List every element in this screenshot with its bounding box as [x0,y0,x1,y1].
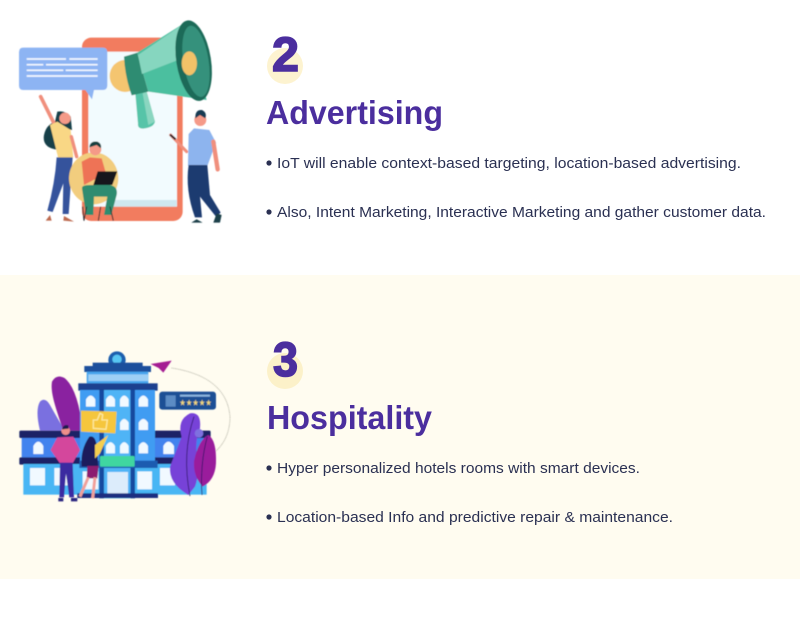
hotel wings [19,431,211,495]
panel: hospitality background [0,275,800,579]
plants right [170,413,216,496]
speech bubble [19,48,107,99]
hotel tower [77,351,158,498]
plants left [37,376,83,431]
bullet: smart rooms: Hyper personalized hotels rooms with smart devices. [277,460,640,477]
megaphone [110,18,217,129]
thumbs up sign [81,411,117,433]
heading: Hospitality: Hospitality [267,399,433,436]
bullet: context targeting: IoT will enable context-based targeting, location-based advertising. [277,155,741,172]
rating badge [159,392,216,410]
heading: Advertising: Advertising [266,94,443,131]
paper plane [151,361,172,373]
rating badge: ★★★★★ [179,397,212,407]
number 3 with circle: 3 [273,334,298,387]
man [51,425,80,501]
illustration: hotel [19,351,230,501]
seated man with laptop [69,142,118,221]
number 2 with circle: 2 [272,29,299,82]
bullet: predictive repair: Location-based Info and predictive repair & maintenance. [277,509,673,526]
phone [82,38,183,221]
woman [41,97,77,222]
illustration: advertising megaphone and phone [19,18,222,223]
bullet: intent marketing: Also, Intent Marketing, Interactive Marketing and gather customer data. [277,204,766,221]
dotted flight path [172,368,230,453]
woman holding sign [80,435,108,498]
standing man [170,110,222,223]
